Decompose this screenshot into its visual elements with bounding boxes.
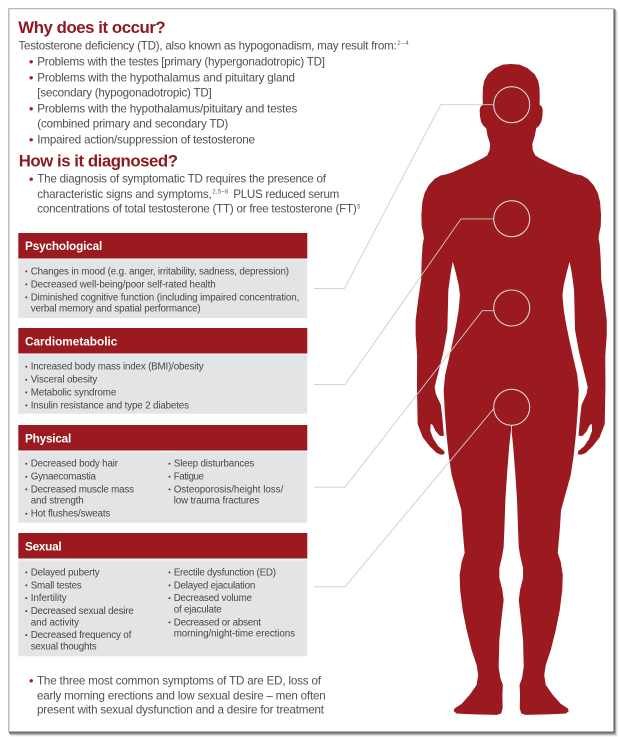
closing note: early morning erections and low sexual desire – men often xyxy=(37,689,326,702)
causes list: Problems with the testes [primary (hypergonadotropic) TD] xyxy=(37,55,325,68)
sexual symptoms: Delayed puberty xyxy=(31,567,100,578)
leader line: physical to abdomen xyxy=(314,311,494,487)
sexual symptoms: sexual thoughts xyxy=(31,641,97,652)
crotch marker line xyxy=(510,426,512,432)
physical symptoms: Decreased body hair xyxy=(31,459,119,470)
panel: psychological xyxy=(18,233,307,318)
cardiometabolic symptoms xyxy=(18,355,307,414)
sexual symptoms: Decreased or absent xyxy=(174,617,261,628)
cardiometabolic symptoms: Visceral obesity xyxy=(31,375,97,386)
cardiometabolic header xyxy=(18,328,307,354)
sexual symptoms: Infertility xyxy=(31,593,67,604)
intro text: Testosterone deficiency (TD), also known as hypogonadism, may result from: xyxy=(18,39,397,52)
panel: cardiometabolic xyxy=(18,328,307,414)
physical symptoms: Decreased muscle mass xyxy=(31,484,134,495)
physical symptoms: low trauma fractures xyxy=(174,496,259,507)
sexual symptoms: Decreased frequency of xyxy=(31,630,132,641)
panel: how is it diagnosed xyxy=(19,152,361,216)
diagnosis text: concentrations of total testosterone (TT) or free testosterone (FT) xyxy=(37,203,357,216)
diagnosis text: The diagnosis of symptomatic TD requires the presence of xyxy=(37,173,327,186)
psychological symptoms: Decreased well-being/poor self-rated health xyxy=(31,279,216,290)
intro text: 2–4 xyxy=(397,41,409,47)
physical header xyxy=(18,425,307,450)
diagnosis text: PLUS reduced serum xyxy=(233,188,339,201)
physical symptoms: Osteoporosis/height loss/ xyxy=(174,484,284,495)
sexual header: Sexual xyxy=(25,540,62,554)
leader line: psychological to head xyxy=(314,105,494,288)
causes list: (combined primary and secondary TD) xyxy=(37,117,228,130)
psychological header xyxy=(18,233,307,258)
heading: why does it occur: Why does it occur? xyxy=(18,18,166,37)
psychological symptoms: verbal memory and spatial performance) xyxy=(31,304,201,315)
sexual symptoms: Delayed ejaculation xyxy=(174,580,255,591)
circle marker: groin xyxy=(494,389,530,425)
panel: why does it occur xyxy=(18,18,409,146)
closing note xyxy=(30,674,326,717)
panel: sexual xyxy=(18,533,307,656)
cardiometabolic symptoms: Metabolic syndrome xyxy=(31,387,117,398)
psychological symptoms: Changes in mood (e.g. anger, irritability, sadness, depression) xyxy=(31,266,289,277)
psychological symptoms xyxy=(18,260,307,318)
sexual symptoms: Decreased sexual desire xyxy=(31,606,134,617)
causes list: Problems with the hypothalamus and pituitary gland xyxy=(37,71,295,84)
psychological symptoms: Diminished cognitive function (including impaired concentration, xyxy=(31,292,299,303)
sexual symptoms: Decreased volume xyxy=(174,593,253,604)
causes list: [secondary (hypogonadotropic) TD] xyxy=(37,87,212,100)
physical symptoms: Hot flushes/sweats xyxy=(31,509,110,520)
physical header: Physical xyxy=(25,431,71,445)
causes list: Problems with the hypothalamus/pituitary and testes xyxy=(37,102,298,115)
circle marker: abdomen xyxy=(494,290,530,326)
circle marker: head xyxy=(494,87,530,123)
cardiometabolic symptoms: Increased body mass index (BMI)/obesity xyxy=(31,362,204,373)
closing note: present with sexual dysfunction and a desire for treatment xyxy=(37,704,325,717)
cardiometabolic header: Cardiometabolic xyxy=(25,334,118,348)
sexual symptoms xyxy=(18,560,307,656)
sexual symptoms: morning/night-time erections xyxy=(174,629,295,640)
leader line: sexual to groin xyxy=(314,408,494,587)
sexual symptoms: and activity xyxy=(31,617,79,628)
physical symptoms: and strength xyxy=(31,496,84,507)
sexual symptoms: Small testes xyxy=(31,580,82,591)
sexual symptoms: Erectile dysfunction (ED) xyxy=(174,567,276,578)
closing note: The three most common symptoms of TD are ED, loss of xyxy=(37,674,322,687)
diagnosis text: 2,5–8 xyxy=(212,190,229,196)
heading: how is it diagnosed: How is it diagnosed? xyxy=(19,152,178,171)
sexual header xyxy=(18,533,307,558)
cardiometabolic symptoms: Insulin resistance and type 2 diabetes xyxy=(31,400,189,411)
causes list: Impaired action/suppression of testosterone xyxy=(37,133,255,146)
diagnosis text: characteristic signs and symptoms, xyxy=(37,188,212,201)
circle marker: chest xyxy=(494,201,530,237)
physical symptoms xyxy=(18,452,307,523)
diagnosis text xyxy=(30,173,361,216)
leader line: cardiometabolic to chest xyxy=(314,219,494,385)
body silhouette xyxy=(416,64,606,715)
physical symptoms: Fatigue xyxy=(174,472,205,483)
panel: physical xyxy=(18,425,307,523)
psychological header: Psychological xyxy=(25,239,102,253)
physical symptoms: Sleep disturbances xyxy=(174,459,254,470)
diagnosis text: 5 xyxy=(357,204,361,210)
physical symptoms: Gynaecomastia xyxy=(31,472,97,483)
causes list xyxy=(30,55,325,146)
sexual symptoms: of ejaculate xyxy=(174,604,222,615)
